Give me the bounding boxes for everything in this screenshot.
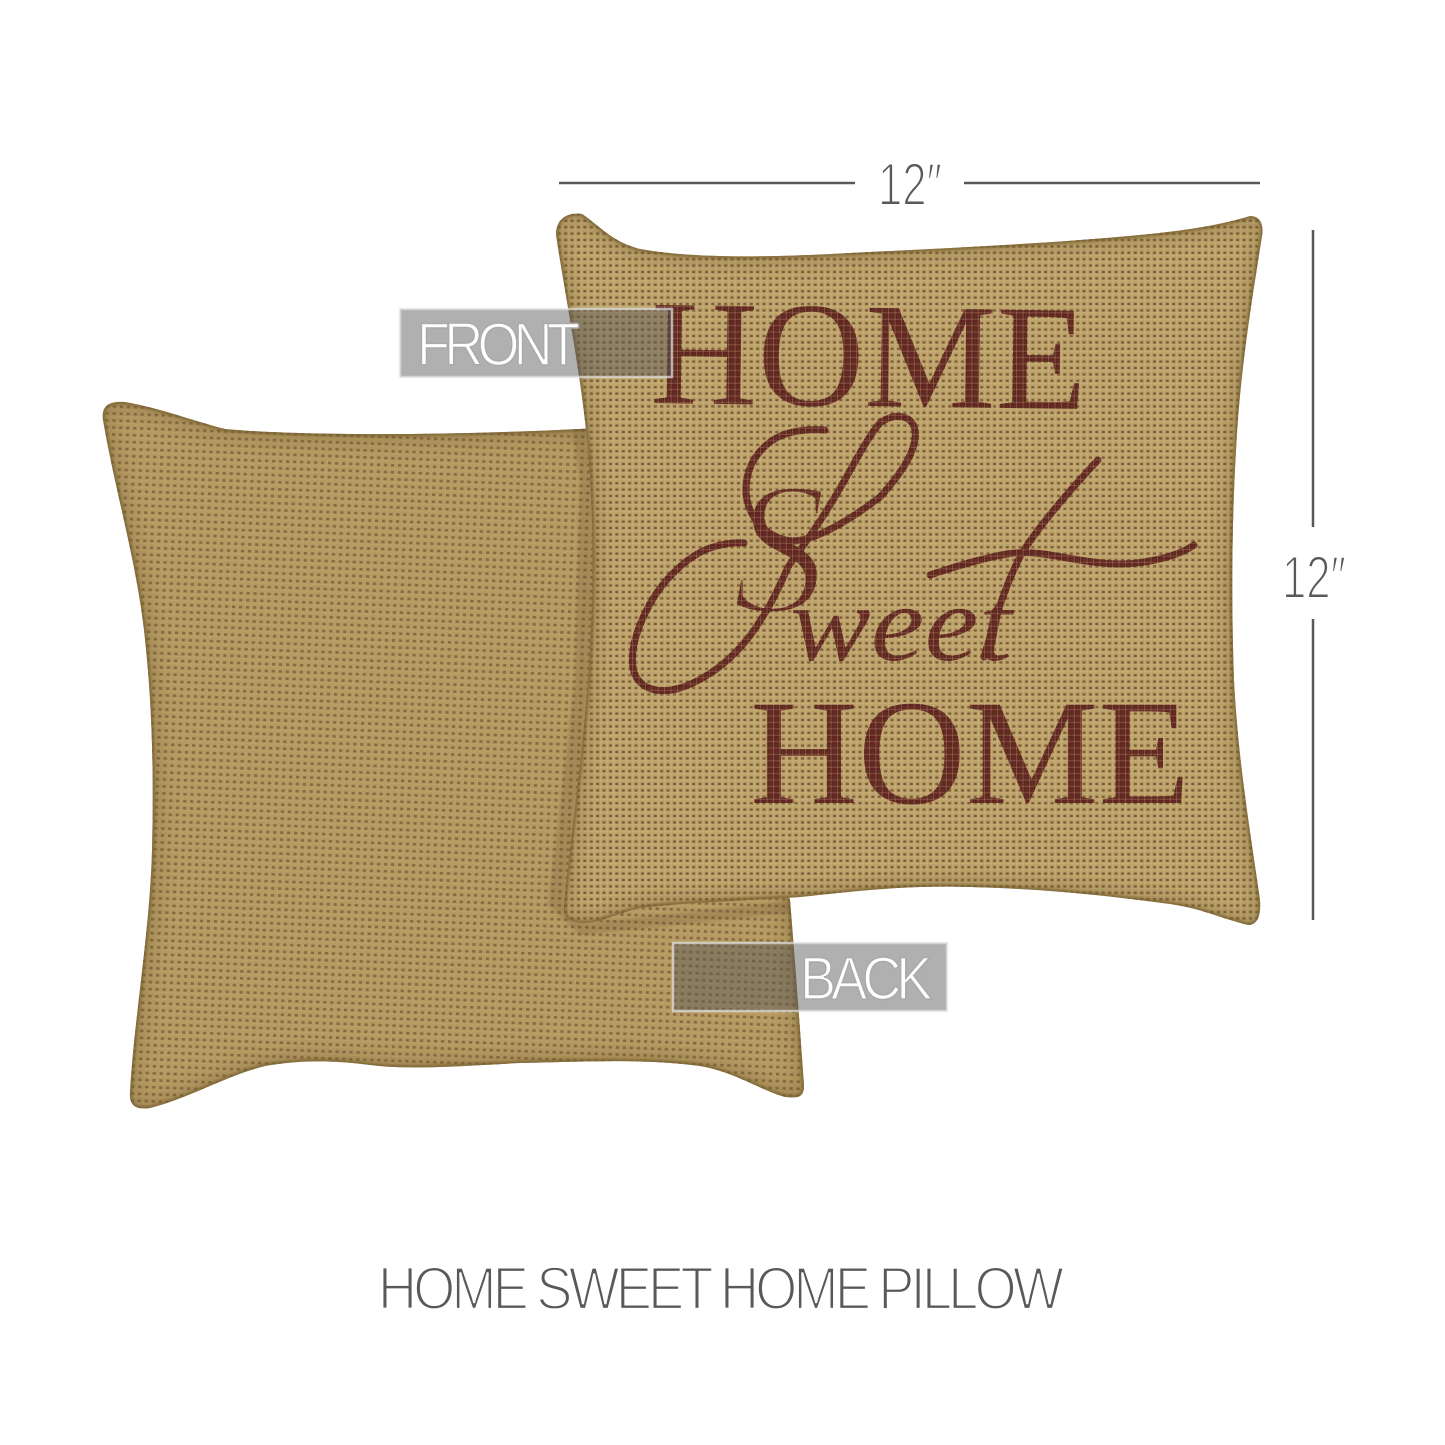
caption: HOME SWEET HOME PILLOW	[378, 1255, 1064, 1323]
printed word: HOME (bottom): HOME	[750, 670, 1190, 836]
letter S: S	[732, 444, 827, 654]
label: FRONT	[400, 309, 672, 379]
printed word: HOME (top): HOME	[650, 270, 1088, 442]
front pillow shadow on back pillow	[548, 428, 791, 935]
label: BACK: BACK	[800, 945, 932, 1013]
letters weet: weet	[790, 565, 1015, 684]
back pillow	[90, 390, 820, 1120]
lettering flourish: upper loop and tail	[632, 416, 915, 691]
printed word: Sweet	[632, 416, 1194, 691]
label: FRONT: FRONT	[417, 311, 580, 379]
label: BACK	[673, 943, 947, 1013]
lettering flourish: long t stroke	[930, 460, 1194, 657]
front pillow with printed sentiment	[540, 200, 1280, 940]
infographic canvas	[102, 164, 1344, 1308]
dimension: height 12 inches: 12″	[1282, 544, 1346, 611]
dimension: width 12 inches: 12″	[878, 151, 942, 218]
